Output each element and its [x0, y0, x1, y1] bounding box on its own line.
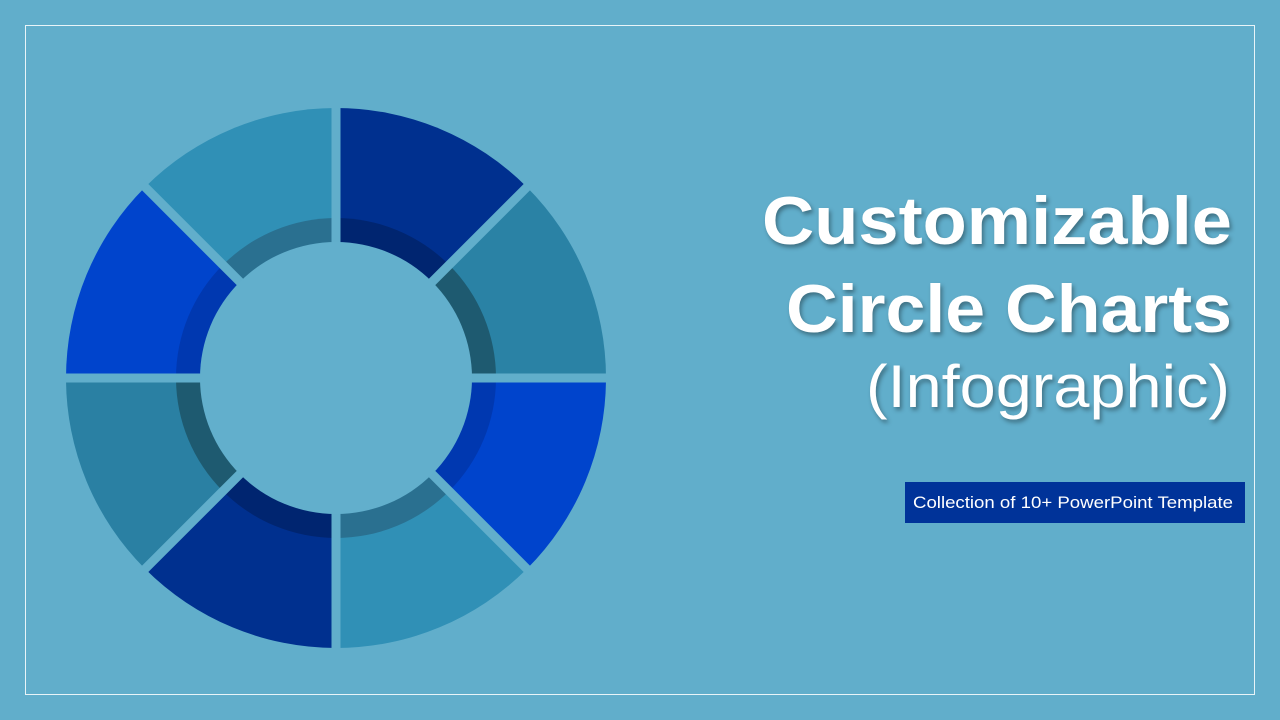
title: Customizable	[762, 183, 1232, 259]
inner ring segments	[176, 218, 496, 538]
badge: Collection of 10+ PowerPoint Template	[913, 493, 1233, 512]
title: Circle Charts	[786, 271, 1232, 347]
center circle	[200, 242, 472, 514]
title: (Infographic)	[866, 353, 1230, 420]
title	[762, 183, 1232, 420]
outer segments	[66, 108, 606, 648]
badge	[905, 482, 1245, 523]
circle chart	[58, 100, 614, 656]
